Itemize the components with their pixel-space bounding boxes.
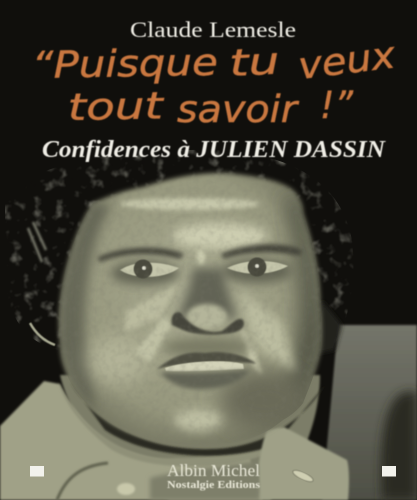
shirt left collar: [0, 381, 262, 500]
handwritten title: savoir: [177, 88, 300, 131]
face: [50, 170, 330, 450]
mouth: [157, 352, 257, 389]
hair lower right tuft: [312, 300, 342, 355]
face shading: right edge: [275, 195, 322, 415]
face shading: left edge: [60, 203, 112, 410]
jaw shading lower right: [220, 370, 310, 430]
handwritten title: veux: [296, 33, 399, 88]
eyebrow right: [221, 244, 302, 259]
cheek highlights: [125, 284, 178, 332]
subtitle: Confidences à JULIEN DASSIN: [42, 137, 387, 163]
handwritten title: tu: [228, 39, 280, 85]
nose bridge glint: [197, 250, 205, 264]
forehead highlights: [120, 198, 260, 210]
collar inner band: [58, 382, 262, 467]
publisher: [167, 461, 260, 491]
shadow under chin: [70, 382, 325, 456]
handwritten title: [31, 33, 399, 131]
centre shirt opening: [150, 460, 262, 500]
mouth shadow above: [163, 337, 251, 357]
collar stud: [292, 468, 314, 484]
nostrils: [172, 312, 244, 335]
hair streaks left: [28, 222, 46, 262]
collar fold line: [57, 463, 108, 500]
eye socket shadows: [111, 261, 179, 285]
author name: Claude Lemesle: [130, 17, 296, 42]
shirt right collar: [259, 427, 349, 500]
handwritten title: tout: [67, 84, 165, 129]
right eye: [227, 258, 288, 276]
skin grain: [102, 198, 284, 428]
button: [117, 483, 135, 495]
left eye: [120, 260, 179, 278]
white square right: [382, 466, 396, 476]
neck: [60, 375, 320, 500]
publisher: Albin Michel: [167, 461, 260, 480]
chin highlight: [174, 409, 222, 431]
ear highlight: [30, 323, 55, 345]
eyebrow left: [97, 248, 184, 262]
dark shape lower right: [381, 392, 417, 500]
nose tip: [187, 304, 227, 328]
handwritten title: “Puisque: [31, 41, 218, 87]
background wall lower right: [322, 325, 417, 500]
hair: [5, 150, 354, 353]
nose bridge: [178, 268, 236, 318]
white square left: [30, 466, 44, 476]
handwritten title: !”: [320, 84, 354, 127]
publisher: Nostalgie Editions: [167, 480, 260, 491]
